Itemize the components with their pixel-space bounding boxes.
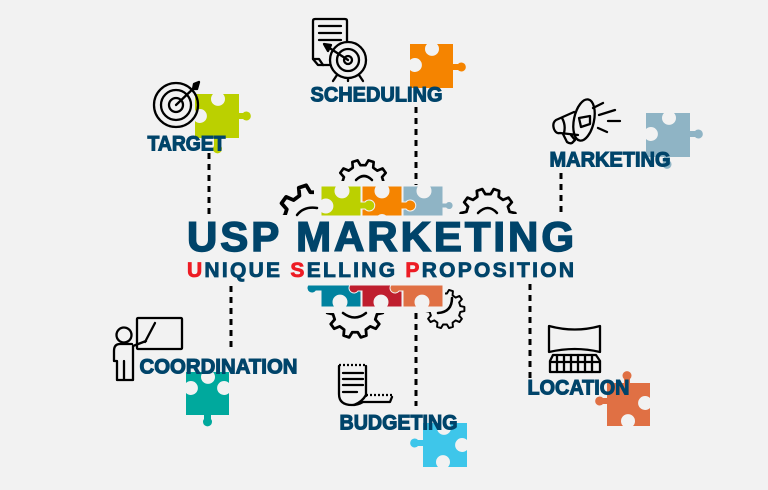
central puzzle bottom row — [307, 285, 443, 307]
panel: coordination — [114, 318, 298, 426]
icon: curved screen and keyboard — [549, 326, 600, 372]
icon: receipt — [339, 365, 392, 405]
label: target: TARGET — [148, 132, 226, 156]
label: scheduling: SCHEDULING — [310, 84, 442, 106]
label: marketing: MARKETING — [550, 148, 670, 172]
puzzle piece: lime — [195, 94, 251, 153]
puzzle piece: teal — [186, 372, 229, 426]
panel: scheduling — [310, 19, 466, 106]
gears around central puzzle — [277, 160, 515, 337]
puzzle piece: orange — [410, 44, 466, 88]
dashed connector lines — [209, 107, 561, 406]
panel: budgeting — [339, 365, 467, 467]
label: budgeting: BUDGETING — [340, 412, 458, 434]
central puzzle top row — [321, 186, 453, 216]
subtitle: UNIQUE SELLING PROPOSITION — [187, 259, 574, 282]
icon: presenter at board — [114, 318, 182, 380]
icon: megaphone — [553, 97, 620, 143]
title: USP MARKETING — [187, 213, 574, 260]
puzzle piece: steel blue — [646, 113, 703, 169]
puzzle piece: sky blue — [410, 423, 467, 467]
puzzle piece: coral — [595, 371, 650, 426]
panel: target — [148, 82, 251, 156]
panel: marketing — [550, 97, 703, 172]
label: location: LOCATION — [528, 376, 630, 400]
icon: document with target — [313, 19, 366, 81]
label: coordination: COORDINATION — [140, 356, 298, 378]
panel: location — [528, 326, 650, 426]
icon: target with arrow — [154, 82, 199, 127]
